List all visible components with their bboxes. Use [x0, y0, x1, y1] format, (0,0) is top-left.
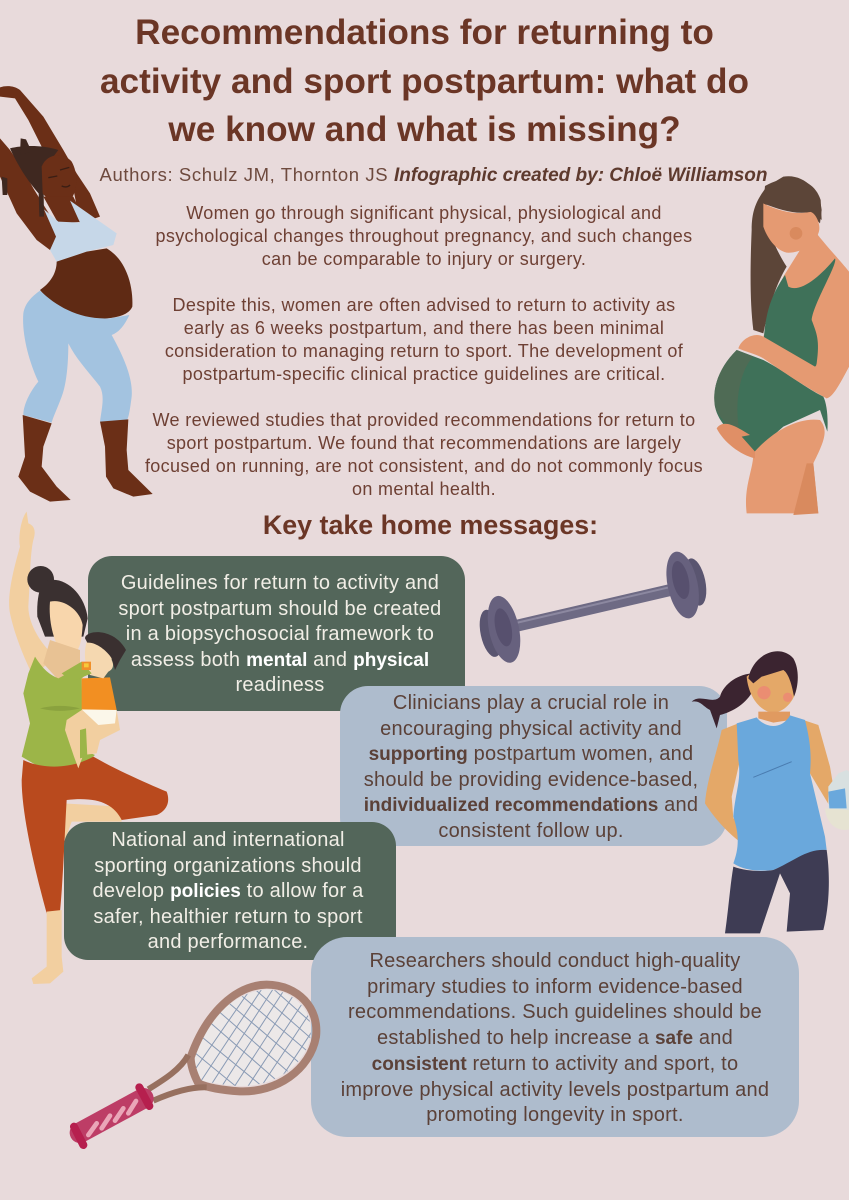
title: Recommendations for returning to	[135, 13, 714, 52]
intro text block: consideration to managing return to sport. The development of	[165, 341, 683, 361]
panel text: sport postpartum should be created	[118, 598, 442, 620]
title: we know and what is missing?	[168, 110, 681, 149]
panel text: consistent follow up.	[438, 820, 624, 842]
intro text block: on mental health.	[352, 479, 496, 499]
panel text: Guidelines for return to activity and	[121, 572, 439, 594]
icon: tennis racket	[70, 980, 320, 1149]
panel text: National and international	[111, 829, 345, 851]
panel: guidelines message	[88, 556, 465, 711]
panel text: in a biopsychosocial framework to	[126, 623, 434, 645]
panel text: encouraging physical activity and	[380, 718, 682, 740]
illustration: woman in blue top with water bottle	[692, 651, 849, 934]
panel text: improve physical activity levels postpartum and	[341, 1079, 769, 1101]
panel text: promoting longevity in sport.	[426, 1104, 684, 1126]
sub-element: trousers and bent leg	[22, 757, 168, 984]
panel: sporting organizations message	[64, 822, 396, 960]
authors line: Authors: Schulz JM, Thornton JS Infographic created by: Chloë Williamson	[100, 164, 768, 186]
intro text block	[145, 203, 703, 499]
sub-element: baby	[62, 632, 126, 768]
panel text: Clinicians play a crucial role in	[393, 692, 669, 714]
intro text block: Despite this, women are often advised to return to activity as	[173, 295, 675, 315]
panel text: supporting postpartum women, and	[369, 743, 693, 765]
intro text block: postpartum-specific clinical practice guidelines are critical.	[183, 364, 665, 384]
heading: key take home messages: Key take home messages:	[263, 510, 598, 540]
intro text block: We reviewed studies that provided recommendations for return to	[152, 410, 695, 430]
panel text: primary studies to inform evidence-based	[367, 976, 743, 998]
panel text: sporting organizations should	[94, 854, 362, 876]
intro text block: Women go through significant physical, physiological and	[186, 203, 662, 223]
icon: barbell	[480, 552, 706, 663]
panel text	[118, 572, 442, 696]
illustration: pregnant woman in green swimsuit	[714, 176, 849, 515]
panel: researchers message	[311, 937, 799, 1137]
panel text: readiness	[236, 674, 324, 696]
panel text	[341, 950, 769, 1126]
panel text: develop policies to allow for a	[92, 880, 364, 902]
panel text: safer, healthier return to sport	[93, 906, 363, 928]
intro text block: sport postpartum. We found that recommendations are largely	[167, 433, 681, 453]
panel text: consistent return to activity and sport, to	[372, 1053, 738, 1075]
intro text block: early as 6 weeks postpartum, and there has been minimal	[184, 318, 664, 338]
illustration: mother in yoga tree pose holding baby	[9, 512, 168, 984]
title	[100, 13, 749, 149]
intro text block: psychological changes throughout pregnancy, and such changes	[155, 226, 693, 246]
panel text: should be providing evidence-based,	[364, 769, 698, 791]
panel text: assess both mental and physical	[131, 648, 429, 670]
panel text	[364, 692, 698, 842]
panel text: established to help increase a safe and	[377, 1027, 733, 1049]
panel: clinicians message	[340, 686, 727, 846]
panel text: and performance.	[148, 931, 308, 953]
panel text	[92, 829, 364, 953]
panel text: individualized recommendations and	[364, 794, 698, 816]
illustration: stretching pregnant woman	[0, 86, 153, 502]
title: activity and sport postpartum: what do	[100, 62, 749, 100]
intro text block: focused on running, are not consistent, and do not commonly focus	[145, 456, 703, 476]
panel text: recommendations. Such guidelines should be	[348, 1001, 762, 1023]
panel text: Researchers should conduct high-quality	[369, 950, 741, 972]
intro text block: can be comparable to injury or surgery.	[262, 249, 586, 269]
